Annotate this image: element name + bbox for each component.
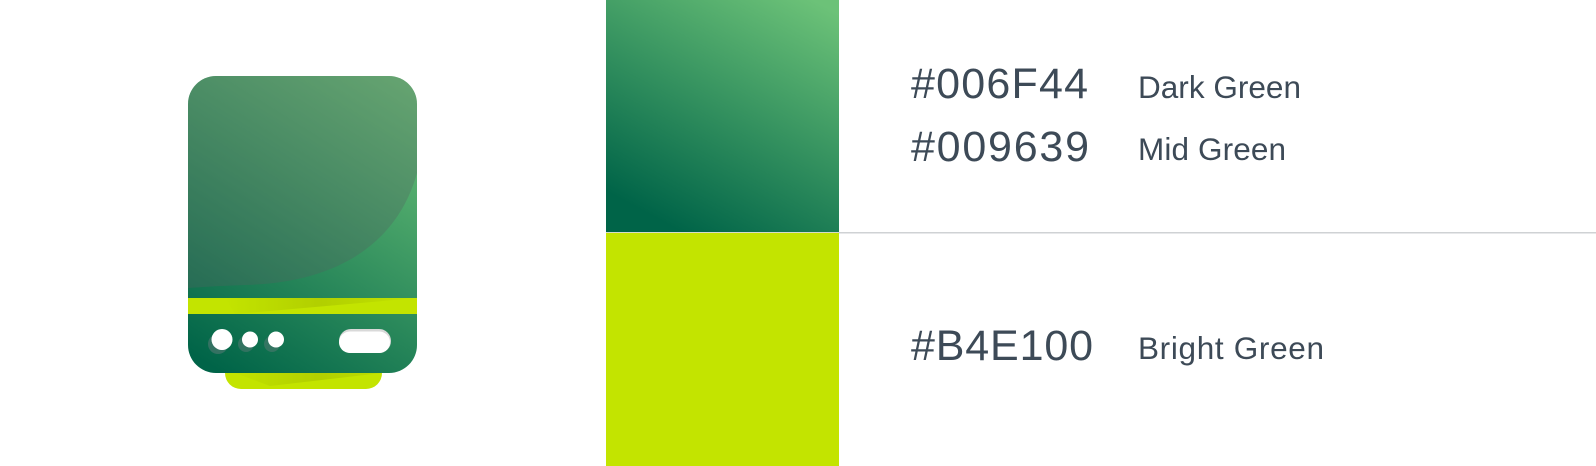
label: mid green: Mid Green bbox=[1138, 131, 1286, 167]
label: bright green: #B4E100 bbox=[911, 322, 1093, 370]
device body bbox=[188, 76, 417, 373]
label: dark green: Dark Green bbox=[1138, 69, 1301, 105]
device upper panel overlay bbox=[188, 76, 417, 288]
swatch: dark to mid green gradient bbox=[606, 0, 839, 232]
label: mid green bbox=[911, 123, 1286, 171]
icon: green device bbox=[188, 76, 417, 389]
device base bbox=[225, 365, 382, 389]
swatch: bright green bbox=[606, 233, 839, 466]
indicator lights bbox=[208, 329, 284, 354]
label: dark green bbox=[911, 60, 1301, 108]
label: dark green: #006F44 bbox=[911, 60, 1088, 108]
label: bright green: Bright Green bbox=[1138, 330, 1324, 366]
label: mid green: #009639 bbox=[911, 123, 1089, 171]
device bright band bbox=[188, 298, 417, 314]
device button bbox=[339, 329, 391, 353]
label: bright green bbox=[911, 322, 1324, 370]
